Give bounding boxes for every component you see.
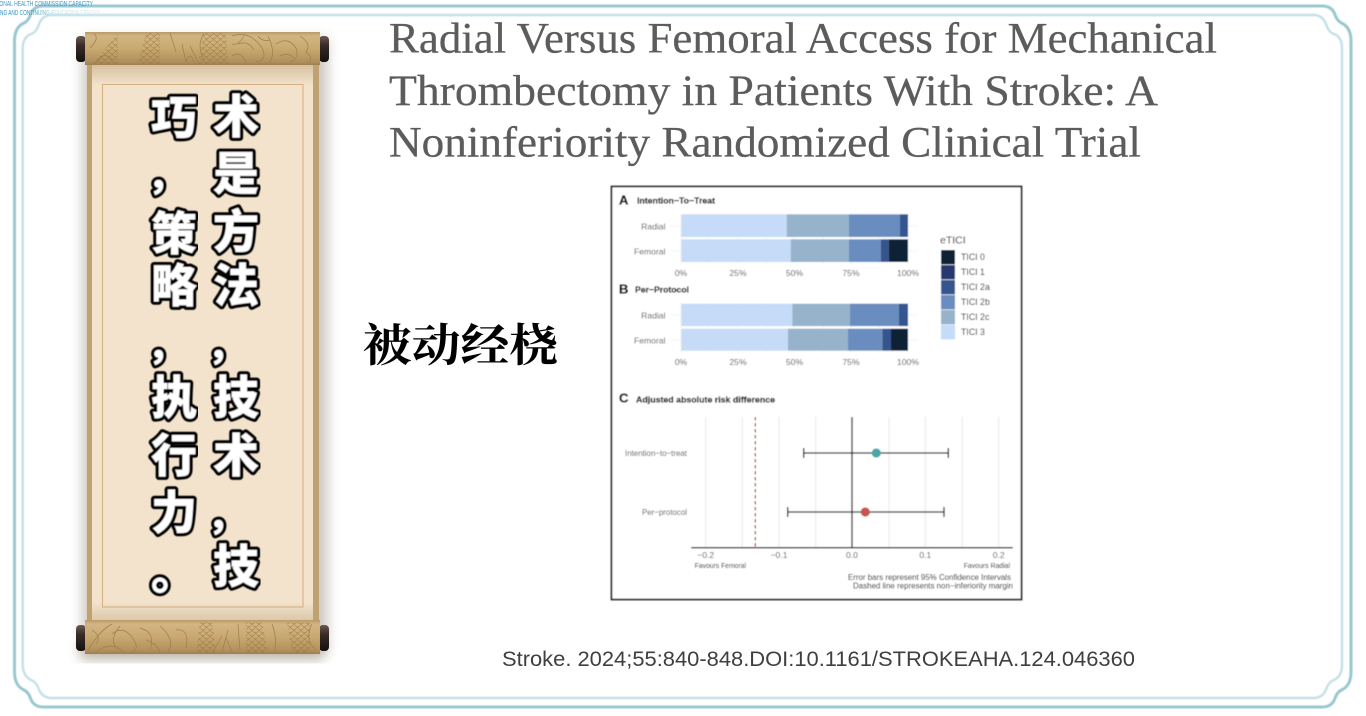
per-protocol estimate bbox=[642, 507, 944, 517]
panel C: adjusted absolute risk difference bbox=[619, 390, 1013, 590]
panel B: per-protocol: Femoral bbox=[634, 336, 666, 346]
x axis bbox=[691, 547, 1013, 549]
top roller bbox=[76, 32, 329, 65]
legend: eTICI bbox=[940, 234, 990, 339]
citation: Stroke. 2024;55:840-848.DOI:10.1161/STROKEAHA.124.046360 bbox=[502, 648, 1135, 671]
zero line bbox=[851, 417, 853, 547]
scroll text: left column: 略 bbox=[151, 250, 197, 316]
title: Noninferiority Randomized Clinical Trial bbox=[389, 120, 1141, 166]
femoral bar bbox=[681, 239, 908, 262]
scroll text: left column: 力 bbox=[151, 477, 197, 543]
scroll text: left column: 巧 bbox=[151, 82, 197, 148]
femoral bar bbox=[681, 329, 908, 351]
panel B: per-protocol: 0% bbox=[675, 357, 688, 367]
legend: eTICI: eTICI bbox=[940, 234, 966, 246]
bottom roller bbox=[76, 620, 329, 654]
legend: eTICI: TICI 2c bbox=[961, 312, 990, 322]
scroll text: right column bbox=[207, 81, 259, 597]
panel C: adjusted absolute risk difference: Favours Femoral bbox=[695, 561, 746, 570]
scroll text: left column: ， bbox=[147, 145, 185, 200]
panel B: per-protocol: 50% bbox=[786, 357, 803, 367]
panel A: intention-to-treat: Radial bbox=[641, 222, 666, 232]
scroll text: right column: 是 bbox=[213, 138, 259, 204]
panel A: intention-to-treat: 100% bbox=[897, 268, 919, 278]
title: Thrombectomy in Patients With Stroke: A bbox=[389, 68, 1158, 115]
side label: 被动经桡 bbox=[363, 309, 558, 374]
organisation caption, top left bbox=[0, 1, 100, 17]
panel B: per-protocol: B bbox=[619, 282, 628, 296]
scroll text: right column: 技 bbox=[213, 531, 259, 597]
panel C: adjusted absolute risk difference: −0.1 bbox=[771, 550, 788, 560]
scroll text: left column: 执 bbox=[151, 362, 197, 428]
organisation caption, top left: IONAL HEALTH COMMISSION CAPACITY bbox=[0, 1, 93, 8]
scroll text: right column: 技 bbox=[213, 362, 259, 428]
panel C: adjusted absolute risk difference: Adjusted absolute risk difference bbox=[636, 394, 775, 404]
panel A: intention-to-treat: Femoral bbox=[634, 246, 666, 256]
legend: eTICI: TICI 2b bbox=[961, 297, 990, 307]
panel B: per-protocol: 25% bbox=[729, 357, 747, 367]
scroll text: right column: ， bbox=[207, 315, 245, 370]
panel B: per-protocol: Per−Protocol bbox=[635, 284, 689, 294]
chart notes: Error bars represent 95% Confidence Intervals bbox=[848, 573, 1011, 582]
panel C: adjusted absolute risk difference: 0.1 bbox=[919, 550, 931, 560]
scroll text: right column: 术 bbox=[213, 81, 259, 147]
scroll bbox=[76, 32, 329, 660]
chart notes bbox=[848, 573, 1013, 590]
panel C: adjusted absolute risk difference: 0.0 bbox=[846, 550, 858, 560]
legend: eTICI: TICI 2a bbox=[961, 282, 990, 292]
panel C: adjusted absolute risk difference: C bbox=[619, 390, 629, 406]
panel B: per-protocol: Radial bbox=[641, 310, 666, 320]
scroll shadow bbox=[80, 38, 328, 660]
panel C: adjusted absolute risk difference: Favours Radial bbox=[964, 561, 1010, 570]
radial bar bbox=[681, 214, 908, 237]
panel C: adjusted absolute risk difference: 0.2 bbox=[993, 550, 1005, 560]
intention-to-treat estimate bbox=[625, 448, 948, 458]
scroll text: right column: 方 bbox=[213, 196, 259, 262]
legend: eTICI: TICI 3 bbox=[961, 327, 985, 337]
scroll text: left column: 行 bbox=[151, 420, 197, 486]
panel B: per-protocol: 75% bbox=[842, 357, 860, 367]
panel A: intention-to-treat: 25% bbox=[729, 268, 747, 278]
title bbox=[389, 16, 1217, 166]
radial bar bbox=[681, 304, 908, 326]
legend: eTICI: TICI 0 bbox=[961, 252, 985, 262]
panel A: intention-to-treat: 75% bbox=[842, 268, 860, 278]
legend: eTICI: TICI 1 bbox=[961, 267, 985, 277]
panel A: intention-to-treat: 50% bbox=[786, 268, 803, 278]
scroll text: right column: 法 bbox=[213, 250, 259, 316]
figure panel bbox=[612, 186, 1022, 600]
panel A: intention-to-treat bbox=[619, 192, 919, 278]
scroll text: left column: 策 bbox=[151, 198, 197, 264]
scroll text: left column: 。 bbox=[151, 537, 197, 603]
per-protocol estimate: Per−protocol bbox=[642, 507, 687, 517]
scroll text: right column: ， bbox=[207, 485, 245, 540]
panel B: per-protocol bbox=[619, 282, 919, 367]
parchment panel bbox=[87, 62, 319, 622]
scroll text: left column bbox=[147, 82, 197, 603]
panel C: adjusted absolute risk difference: −0.2 bbox=[697, 550, 714, 560]
panel B: per-protocol: 100% bbox=[897, 357, 919, 367]
non-inferiority margin bbox=[754, 417, 756, 547]
title: Radial Versus Femoral Access for Mechanical bbox=[389, 16, 1217, 62]
panel A: intention-to-treat: 0% bbox=[675, 268, 688, 278]
organisation caption, top left: NG AND CONTINUING EDUCATION CENTER bbox=[0, 10, 100, 17]
panel A: intention-to-treat: Intention−To−Treat bbox=[637, 196, 715, 206]
panel A: intention-to-treat: A bbox=[619, 192, 629, 208]
scroll text: right column: 术 bbox=[213, 420, 259, 486]
intention-to-treat estimate: Intention−to−treat bbox=[625, 448, 688, 458]
scroll text: left column: ， bbox=[147, 315, 185, 370]
chart notes: Dashed line represents non−inferiority margin bbox=[853, 582, 1013, 590]
